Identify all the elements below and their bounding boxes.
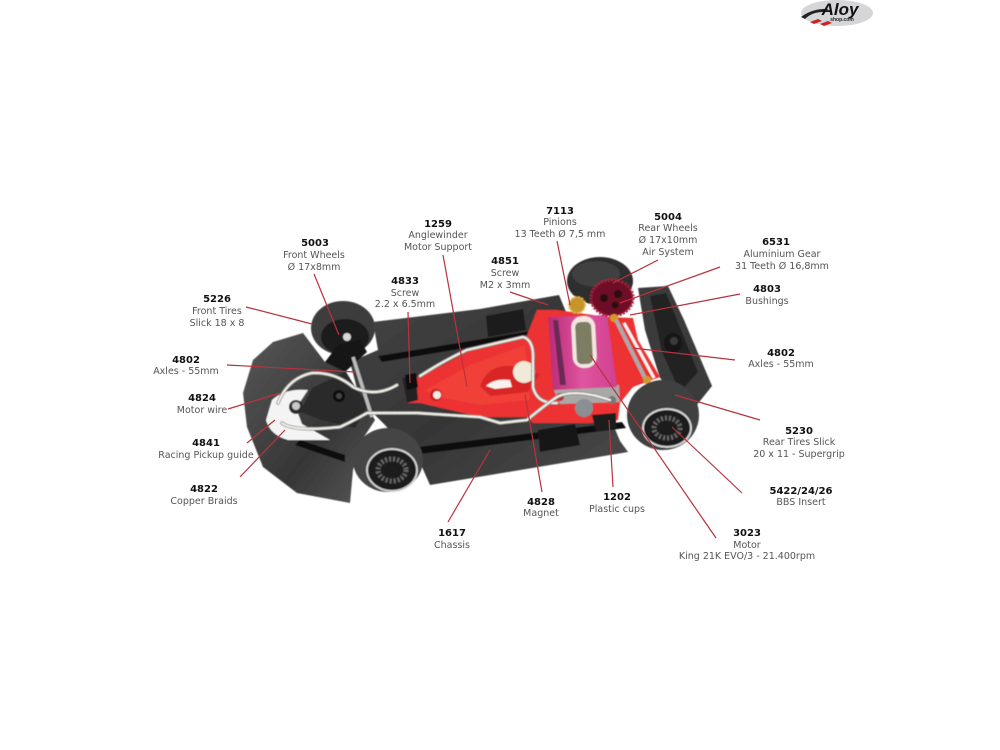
label: 1202 plastic cups: Plastic cups: [589, 504, 645, 515]
pickup guide: [266, 390, 330, 440]
label: 4828 magnet: 4828: [527, 497, 555, 508]
label: 4828 magnet: [523, 497, 559, 519]
label: 4833 screw: [375, 276, 435, 310]
label: 5226 front tires: 5226: [203, 294, 231, 305]
label: 5226 front tires: [190, 294, 244, 329]
label: 5004 rear wheels: Rear Wheels: [638, 223, 698, 234]
label: 7113 pinions: Pinions: [543, 217, 577, 228]
label: 1259 motor support: 1259: [424, 219, 452, 230]
label: 4824 motor wire: [177, 393, 227, 416]
label: 1202 plastic cups: 1202: [603, 492, 631, 503]
rear axle: [616, 320, 654, 384]
label: 3023 motor: King 21K EVO/3 - 21.400rpm: [679, 551, 815, 562]
near front wheel: [353, 428, 423, 492]
chassis front nose: [243, 333, 375, 503]
label: 1617 chassis: [434, 528, 470, 551]
label: 5003 front wheels: [283, 238, 345, 273]
label: 6531 aluminium gear: 6531: [762, 237, 790, 248]
label: 3023 motor: Motor: [733, 540, 761, 551]
logo: Aloy shop: shop.com: [830, 17, 854, 23]
logo: Aloy shop: Aloy: [821, 0, 860, 19]
far rear wheel: [567, 257, 633, 305]
label: 5422/24/26 BBS insert: 5422/24/26: [770, 486, 833, 497]
label: 4802 axles right: Axles - 55mm: [748, 359, 814, 370]
label: 5422/24/26 BBS insert: [770, 486, 833, 508]
label: 4841 pickup guide: Racing Pickup guide: [158, 450, 254, 461]
label: 1617 chassis: Chassis: [434, 540, 470, 551]
label: 5004 rear wheels: [638, 212, 698, 258]
label: 4802 axles left: 4802: [172, 355, 200, 366]
label: 3023 motor: 3023: [733, 528, 761, 539]
pinion and gear: [569, 280, 633, 322]
label: 1259 motor support: Anglewinder: [408, 230, 468, 241]
label: 4802 axles left: [153, 355, 219, 377]
label: 5003 front wheels: Ø 17x8mm: [288, 262, 340, 273]
pod shading and openings: [402, 345, 540, 405]
label: 4851 screw: Screw: [491, 268, 520, 279]
label: 4822 copper braids: Copper Braids: [170, 496, 238, 507]
label: 4824 motor wire: 4824: [188, 393, 216, 404]
label: 4851 screw: M2 x 3mm: [480, 280, 530, 291]
label: 5004 rear wheels: 5004: [654, 212, 682, 223]
label: 5230 rear tires: 20 x 11 - Supergrip: [753, 449, 845, 460]
leader lines: [227, 241, 760, 538]
label: 1259 motor support: [404, 219, 472, 253]
chassis slots and black details: [295, 309, 626, 462]
red motor pod: [402, 310, 660, 423]
label: 5004 rear wheels: Air System: [642, 247, 694, 258]
label: 4824 motor wire: Motor wire: [177, 405, 227, 416]
label: 5004 rear wheels: Ø 17x10mm: [639, 235, 697, 246]
label: 7113 pinions: 13 Teeth Ø 7,5 mm: [515, 229, 605, 240]
label: 6531 aluminium gear: [735, 237, 829, 272]
label: 4851 screw: 4851: [491, 256, 519, 267]
front axle: [353, 357, 372, 417]
label: 4833 screw: 2.2 x 6.5mm: [375, 299, 435, 310]
chassis body plate: [350, 295, 628, 485]
rear tray: [638, 286, 712, 411]
label: 4833 screw: 4833: [391, 276, 419, 287]
label: 3023 motor: [679, 528, 815, 562]
label: 1259 motor support: Motor Support: [404, 242, 472, 253]
label: 4803 bushings: 4803: [753, 284, 781, 295]
label: 5003 front wheels: 5003: [301, 238, 329, 249]
car chassis illustration: [243, 257, 712, 503]
logo: Aloy shop: [801, 0, 873, 26]
label: 4803 bushings: Bushings: [745, 296, 789, 307]
label: 5003 front wheels: Front Wheels: [283, 250, 345, 261]
label: 6531 aluminium gear: 31 Teeth Ø 16,8mm: [735, 261, 829, 272]
label: 5422/24/26 BBS insert: BBS Insert: [776, 497, 826, 508]
label: 5226 front tires: Front Tires: [192, 306, 242, 317]
label: 4841 pickup guide: [158, 438, 254, 461]
label: 6531 aluminium gear: Aluminium Gear: [744, 249, 821, 260]
label: 4802 axles right: 4802: [767, 348, 795, 359]
label: 4822 copper braids: 4822: [190, 484, 218, 495]
label: 4802 axles left: Axles - 55mm: [153, 366, 219, 377]
label: 4851 screw: [480, 256, 530, 291]
label: 4828 magnet: Magnet: [523, 508, 559, 519]
label: 7113 pinions: 7113: [546, 206, 574, 217]
label: 5230 rear tires: Rear Tires Slick: [763, 437, 836, 448]
label: 4833 screw: Screw: [391, 288, 420, 299]
label: 7113 pinions: [515, 206, 605, 240]
label: 4803 bushings: [745, 284, 789, 307]
label: 5230 rear tires: [753, 426, 845, 460]
label: 5226 front tires: Slick 18 x 8: [190, 318, 244, 329]
label: 5230 rear tires: 5230: [785, 426, 813, 437]
label: 1202 plastic cups: [589, 492, 645, 515]
far front wheel: [311, 301, 375, 355]
label: 1617 chassis: 1617: [438, 528, 466, 539]
label: 4822 copper braids: [170, 484, 238, 507]
motor can: [548, 315, 620, 432]
near rear wheel: [627, 380, 699, 450]
label: 4802 axles right: [748, 348, 814, 370]
motor wires: [278, 337, 610, 429]
label: 4841 pickup guide: 4841: [192, 438, 220, 449]
